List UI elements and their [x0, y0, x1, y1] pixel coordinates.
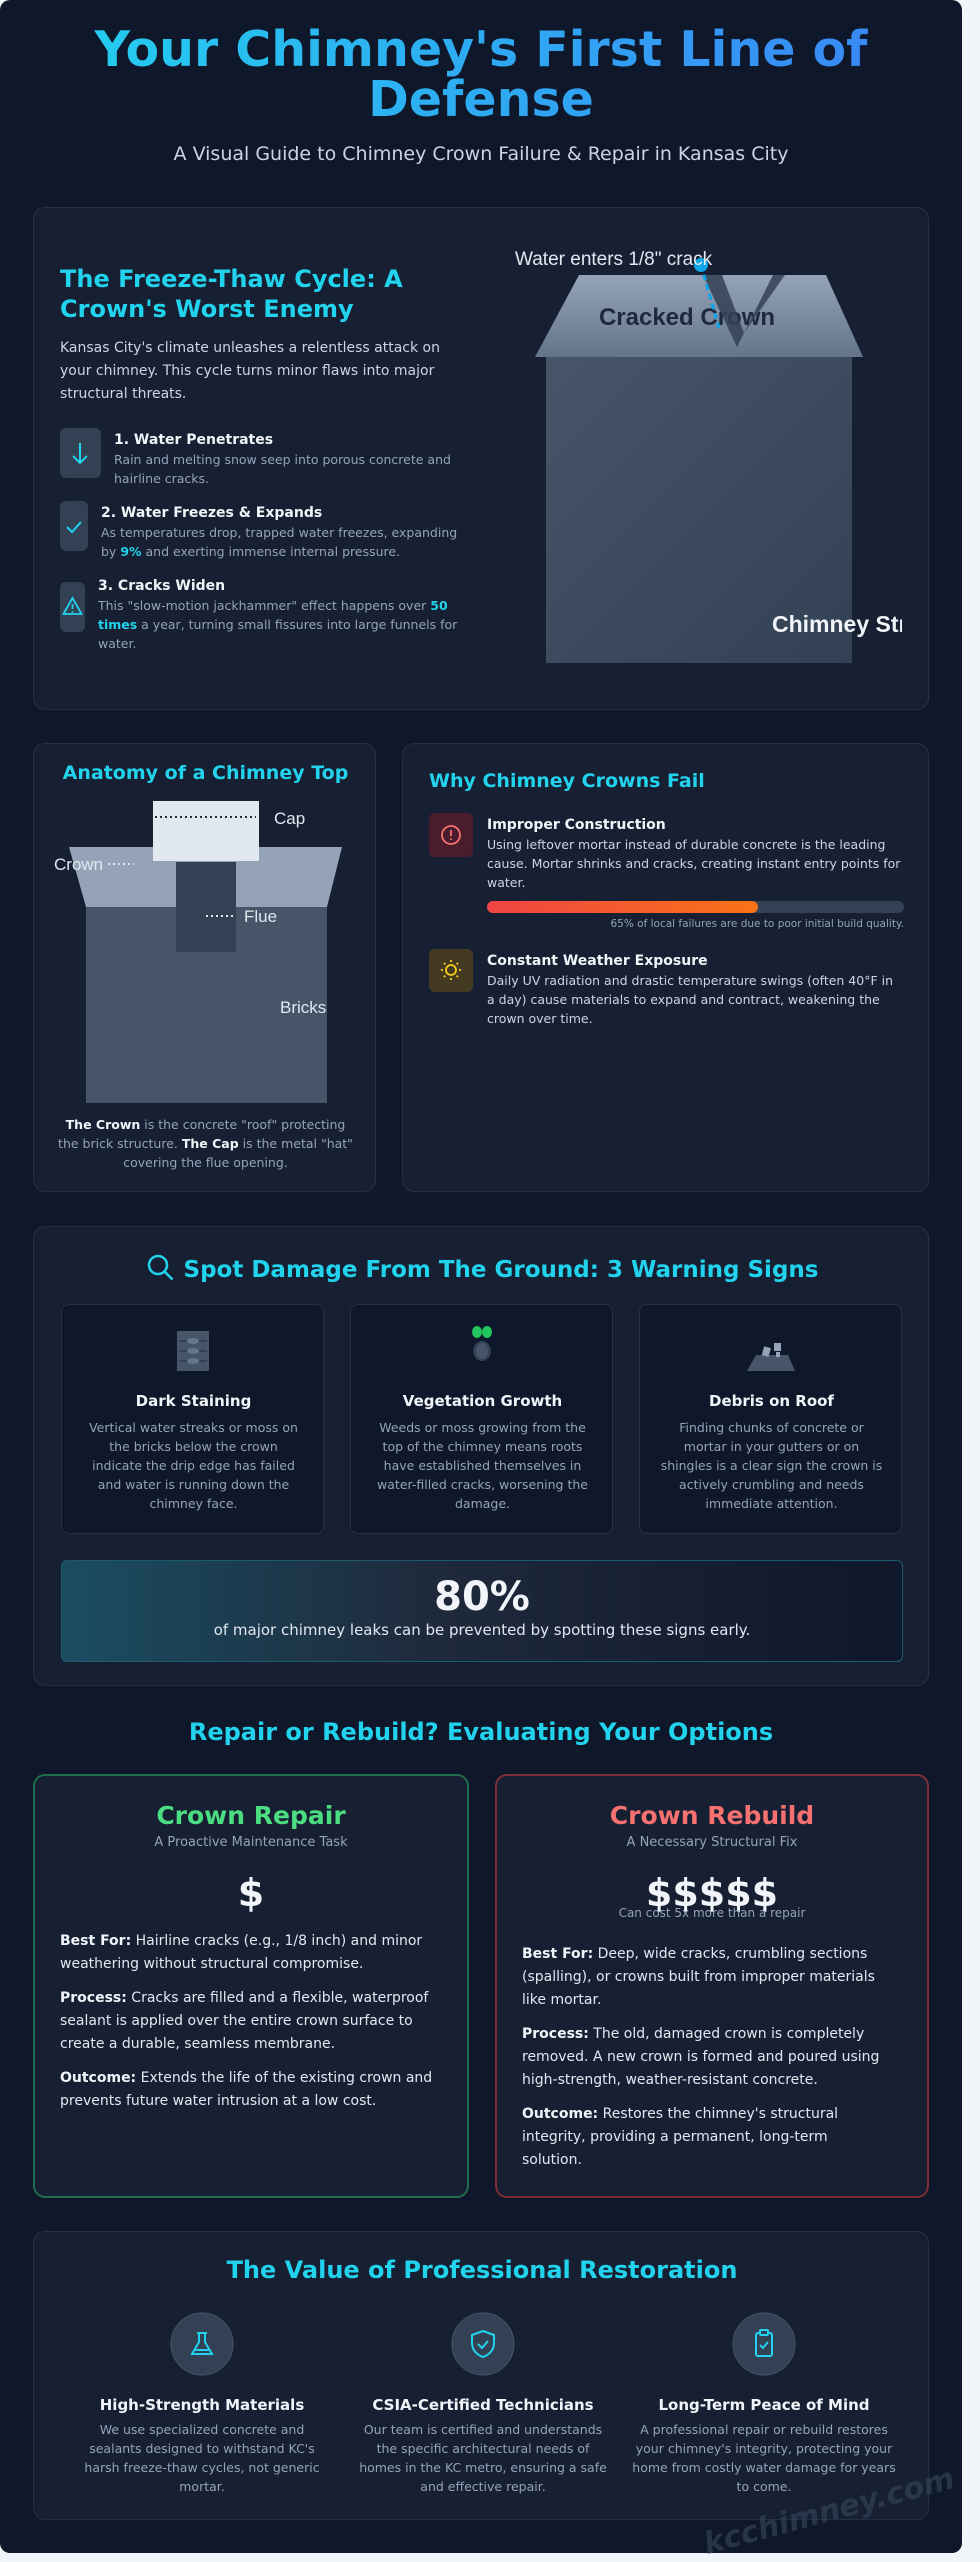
text: rebuild details: Outcome: Restores the chimney's structural integrity, providing a permanent, long-term solution.	[522, 2106, 838, 2168]
card: debris: Debris on Roof	[709, 1392, 834, 1410]
intro text: Kansas City's climate unleashes a relentless attack on your chimney. This cycle turns minor flaws into major structural threats.	[60, 340, 440, 402]
chart: anatomy diagram: Bricks	[280, 998, 326, 1017]
panel: crown rebuild: $$$$$	[646, 1871, 778, 1915]
text: repair details: Outcome: Extends the life of the existing crown and prevents future water intrusion at a low cost.	[60, 2070, 432, 2109]
item: technicians	[359, 2312, 607, 2494]
text: rebuild details	[522, 1946, 879, 2168]
title: Your Chimney's First Line of	[94, 21, 868, 78]
card: debris: Finding chunks of concrete or mortar in your gutters or on shingles is a clear sign the crown is actively crumbling and needs immediate attention.	[661, 1420, 882, 1511]
chart: anatomy diagram: Flue	[244, 907, 277, 926]
panel: value of restoration: The Value of Professional Restoration	[227, 2256, 737, 2284]
chart: anatomy diagram: Crown	[54, 855, 103, 874]
step 3: 3. Cracks Widen	[98, 578, 225, 594]
panel: crown repair	[33, 1774, 469, 2198]
title	[0, 25, 962, 125]
card: debris	[639, 1304, 902, 1534]
step 2	[60, 501, 457, 559]
icon: sun	[429, 949, 473, 992]
text: repair details: Best For: Hairline cracks (e.g., 1/8 inch) and minor weathering without structural compromise.	[60, 1933, 422, 1972]
watermark: kcchimney.com	[700, 2461, 958, 2562]
panel: crown repair: A Proactive Maintenance Task	[154, 1835, 348, 1850]
step 3: This "slow-motion jackhammer" effect happens over 50 times a year, turning small fissures into large funnels for water.	[98, 598, 457, 651]
chart: cracked crown diagram: Water enters 1/8" crack	[515, 249, 713, 270]
heading: warning signs: Spot Damage From The Ground: 3 Warning Signs	[184, 1257, 818, 1283]
step 1: 1. Water Penetrates	[114, 432, 273, 448]
step 2: As temperatures drop, trapped water freezes, expanding by 9% and exerting immense internal pressure.	[101, 525, 457, 559]
subtitle: A Visual Guide to Chimney Crown Failure & Repair in Kansas City	[174, 143, 788, 165]
item: technicians: CSIA-Certified Technicians	[372, 2396, 594, 2414]
panel: freeze-thaw cycle	[33, 207, 929, 710]
card: vegetation: Vegetation Growth	[403, 1392, 562, 1410]
icon: shield	[452, 2312, 514, 2376]
item: materials: We use specialized concrete and sealants designed to withstand KC's harsh freeze-thaw cycles, not generic mortar.	[84, 2422, 320, 2494]
panel: crown repair: Crown Repair	[156, 1801, 346, 1830]
item: weather exposure: Daily UV radiation and drastic temperature swings (often 40°F in a day) cause materials to expand and contract, weakening the crown over time.	[487, 973, 893, 1026]
heading: repair or rebuild: Repair or Rebuild? Evaluating Your Options	[189, 1718, 773, 1746]
heading: anatomy: Anatomy of a Chimney Top	[63, 762, 348, 784]
step 3	[60, 578, 458, 651]
item: improper construction	[429, 813, 904, 930]
panel: crown rebuild: Can cost 5x more than a repair	[619, 1906, 805, 1920]
panel: why crowns fail	[402, 743, 929, 1192]
chart: anatomy diagram: Cap	[274, 809, 305, 828]
heading: why fail: Why Chimney Crowns Fail	[429, 770, 705, 792]
callout: 80% stat: of major chimney leaks can be prevented by spotting these signs early.	[214, 1621, 750, 1639]
item: improper construction: 65% of local failures are due to poor initial build quality.	[610, 918, 904, 930]
caption: The Crown is the concrete "roof" protecting the brick structure. The Cap is the metal "hat" covering the flue opening.	[58, 1117, 353, 1170]
step 2: 2. Water Freezes & Expands	[101, 505, 322, 521]
item: peace of mind: A professional repair or rebuild restores your chimney's integrity, protecting your home from costly water damage for years to come.	[632, 2422, 896, 2494]
item: materials: High-Strength Materials	[100, 2396, 304, 2414]
panel: anatomy	[33, 743, 376, 1192]
chart: cracked crown diagram	[515, 249, 924, 663]
text: repair details	[60, 1933, 432, 2109]
panel: crown rebuild	[495, 1774, 929, 2198]
title: Defense	[368, 71, 594, 128]
item: peace of mind: Long-Term Peace of Mind	[658, 2396, 870, 2414]
card: dark staining: Vertical water streaks or moss on the bricks below the crown indicate the drip edge has failed and water is running down the chimney face.	[89, 1420, 298, 1511]
icon: debris	[747, 1343, 795, 1371]
chart: cracked crown diagram: Cracked Crown	[599, 304, 775, 331]
icon: warning	[60, 582, 85, 632]
panel: crown rebuild: A Necessary Structural Fix	[627, 1835, 797, 1850]
panel: value of restoration	[33, 2231, 929, 2520]
item: weather exposure: Constant Weather Exposure	[487, 953, 708, 969]
bar chart: 65%	[487, 901, 904, 913]
item: improper construction: Using leftover mortar instead of durable concrete is the leading cause. Mortar shrinks and cracks, creating instant entry points for water.	[487, 837, 900, 890]
icon: stained bricks	[177, 1331, 209, 1371]
icon: flask	[170, 2312, 234, 2376]
panel: warning signs	[33, 1226, 929, 1686]
panel: crown rebuild: Crown Rebuild	[610, 1801, 814, 1830]
callout: 80% stat	[61, 1560, 903, 1662]
item: peace of mind	[632, 2312, 896, 2494]
heading: freeze-thaw: The Freeze-Thaw Cycle: A Crown's Worst Enemy	[60, 265, 403, 323]
icon: alert	[429, 813, 473, 857]
text: repair details: Process: Cracks are filled and a flexible, waterproof sealant is applied over the entire crown surface to create a durable, seamless membrane.	[60, 1990, 428, 2052]
text: rebuild details: Best For: Deep, wide cracks, crumbling sections (spalling), or crowns built from improper materials like mortar.	[522, 1946, 875, 2008]
icon: arrow down	[60, 428, 101, 478]
chart: anatomy diagram	[54, 801, 342, 1103]
step 1: Rain and melting snow seep into porous concrete and hairline cracks.	[114, 452, 451, 486]
item: technicians: Our team is certified and understands the specific architectural needs of homes in the KC metro, ensuring a safe and effective repair.	[359, 2422, 607, 2494]
item: improper construction: Improper Construction	[487, 817, 666, 833]
icon: plant	[472, 1326, 492, 1361]
text: rebuild details: Process: The old, damaged crown is completely removed. A new crown is formed and poured using high-strength, weather-resistant concrete.	[522, 2026, 879, 2088]
item: weather exposure	[429, 949, 893, 1026]
step 1	[60, 428, 451, 486]
icon: clipboard	[732, 2312, 796, 2376]
icon: check	[60, 501, 88, 551]
card: dark staining	[61, 1304, 324, 1534]
callout: 80% stat: 80%	[434, 1574, 530, 1620]
card: vegetation	[350, 1304, 613, 1534]
card: vegetation: Weeds or moss growing from the top of the chimney means roots have established themselves in water-filled cracks, worsening the damage.	[377, 1420, 588, 1511]
panel: crown repair: $	[238, 1871, 264, 1915]
card: dark staining: Dark Staining	[136, 1392, 251, 1410]
item: materials	[84, 2312, 320, 2494]
